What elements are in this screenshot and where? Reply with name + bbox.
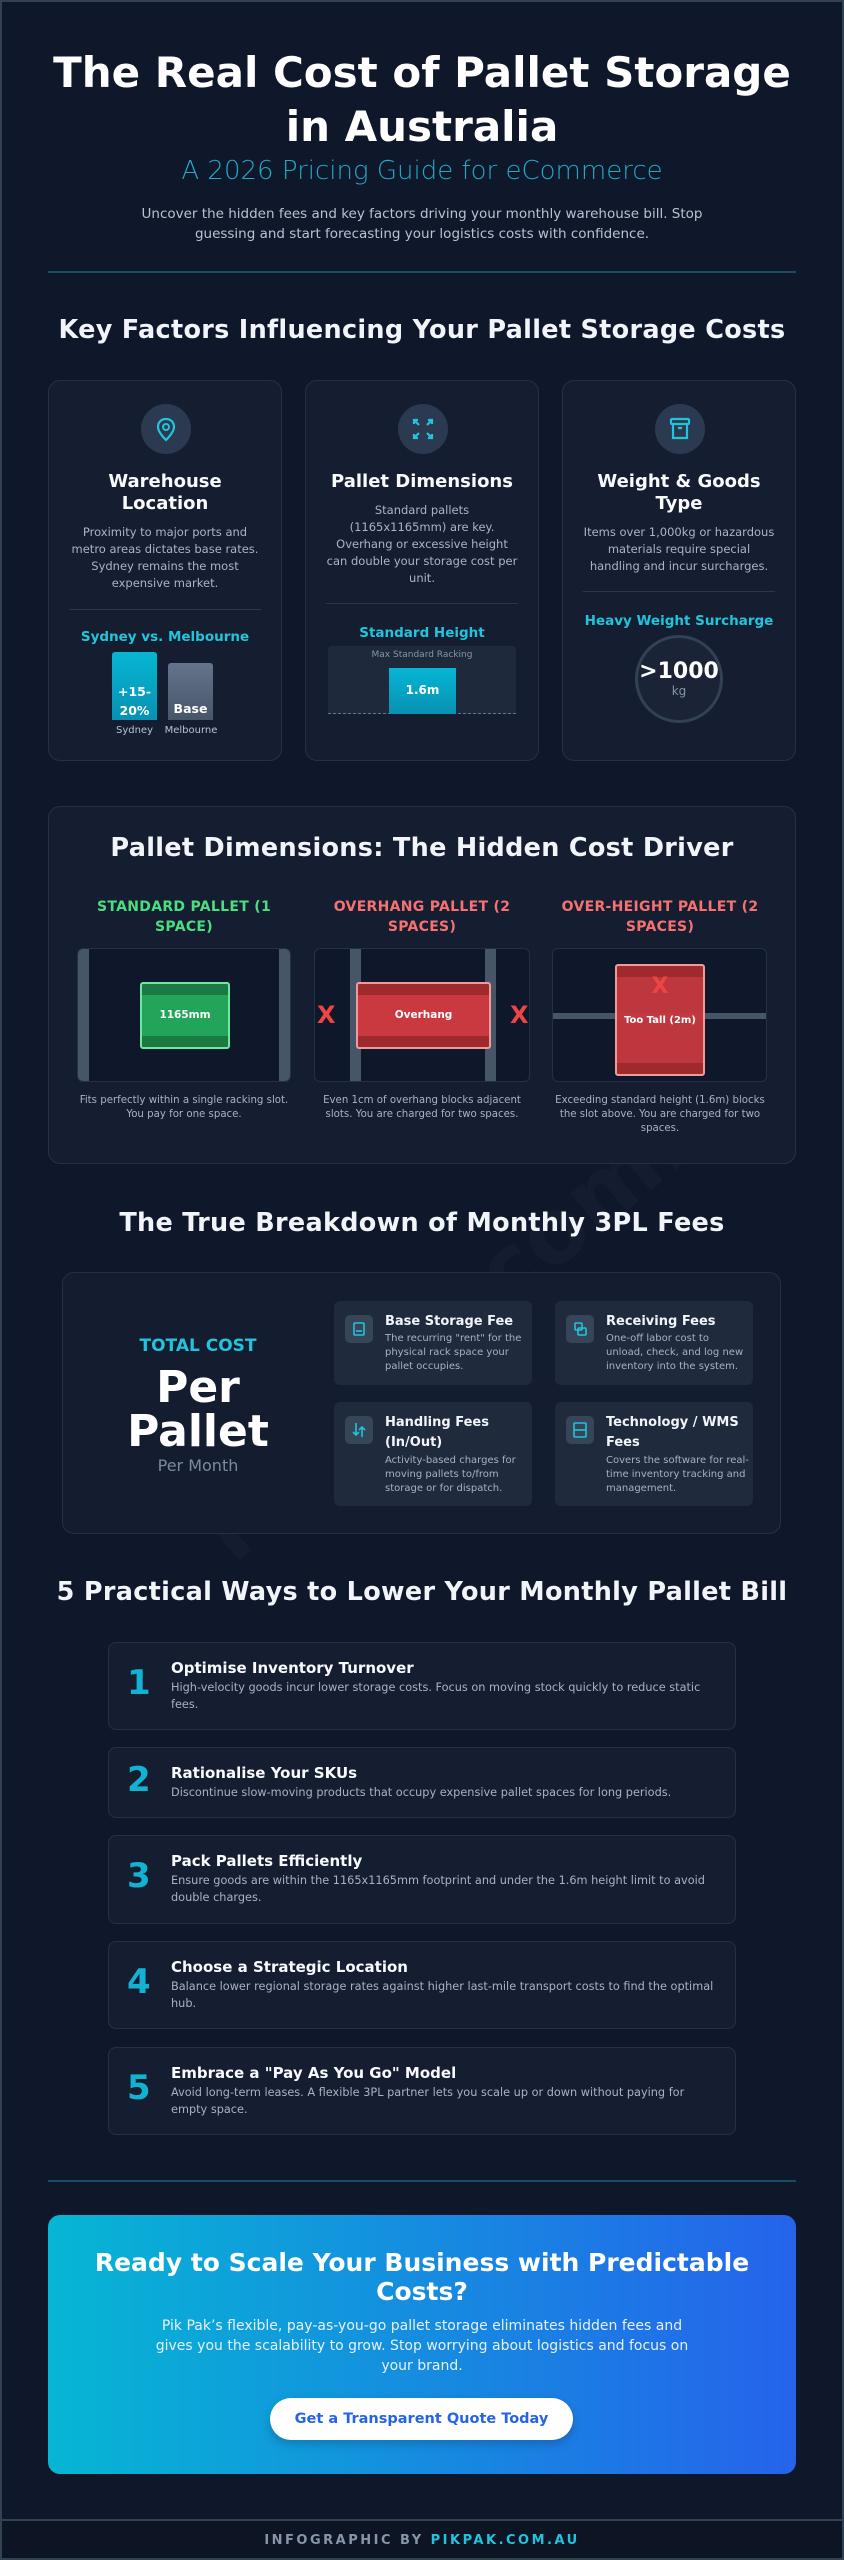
diagram: over-height pallet: [552, 948, 767, 1082]
footer: [0, 2519, 844, 2560]
card title: Type: [656, 493, 702, 514]
tip 4: Balance lower regional storage rates against higher last-mile transport costs to find the optimal hub.: [171, 1980, 713, 2010]
height chart: [328, 646, 516, 714]
tip 2: 2: [127, 1760, 151, 1800]
bar chart: sydney vs melbourne: 20%: [120, 703, 149, 718]
CTA button: [270, 2398, 573, 2440]
CTA heading: Ready to Scale Your Business with Predictable Costs?: [95, 2248, 749, 2306]
caption: overhang: Even 1cm of overhang blocks adjacent slots. You are charged for two spaces.: [323, 1095, 521, 1120]
chart heading: Sydney vs. Melbourne: [81, 629, 249, 645]
fee: handling: Handling Fees: [385, 1415, 489, 1430]
fee: base storage: [334, 1301, 532, 1385]
diagram: over-height pallet: X: [652, 974, 668, 999]
title: The Real Cost of Pallet Storage: [53, 48, 791, 97]
caption: standard: Fits perfectly within a single racking slot. You pay for one space.: [80, 1095, 288, 1120]
intro text: Uncover the hidden fees and key factors driving your monthly warehouse bill. Stop guessing and start forecasting your logistics costs with confidence.: [142, 206, 702, 242]
panel: pallet dimensions hidden cost: [48, 806, 796, 1164]
icon: storage: [345, 1315, 373, 1343]
total cost block: Per: [156, 1362, 240, 1413]
subtitle: A 2026 Pricing Guide for eCommerce: [181, 156, 663, 186]
fee: handling: [334, 1402, 532, 1506]
title: [53, 48, 791, 151]
tip 5: [108, 2047, 736, 2135]
fee: handling: (In/Out): [385, 1435, 442, 1450]
title: in Australia: [286, 102, 558, 151]
diagram: over-height pallet: Too Tall (2m): [624, 1015, 696, 1026]
tip 3: [108, 1835, 736, 1924]
label: standard pallet: SPACE): [155, 919, 213, 935]
panel: fee breakdown: [62, 1272, 781, 1534]
heading: 3PL fees: The True Breakdown of Monthly 3PL Fees: [119, 1208, 725, 1238]
footer: INFOGRAPHIC BY PIKPAK.COM.AU: [264, 2533, 580, 2548]
weight badge: [635, 635, 723, 723]
tip 4: Choose a Strategic Location: [171, 1958, 408, 1976]
bar chart: sydney vs melbourne: Sydney: [116, 725, 153, 736]
label: overhang pallet: SPACES): [388, 919, 456, 935]
heading: key factors: Key Factors Influencing Your Pallet Storage Costs: [58, 315, 785, 345]
tip 1: High-velocity goods incur lower storage costs. Focus on moving stock quickly to reduce static fees.: [171, 1681, 700, 1711]
icon: archive box: [655, 404, 705, 454]
panel: warehouse location: [48, 380, 282, 761]
diagram: standard pallet: 1165mm: [159, 1009, 211, 1021]
total cost block: TOTAL COST: [140, 1336, 256, 1356]
diagram: overhang pallet: X: [317, 1001, 336, 1029]
tip 4: 4: [127, 1962, 151, 2002]
caption: over-height: Exceeding standard height (1.6m) blocks the slot above. You are charged for two spaces.: [555, 1095, 765, 1134]
tip 5: Avoid long-term leases. A flexible 3PL partner lets you scale up or down without paying for empty space.: [171, 2086, 684, 2116]
card title: [597, 471, 761, 514]
height chart: Max Standard Racking: [372, 650, 472, 660]
tip 5: 5: [127, 2068, 151, 2108]
diagram: overhang pallet: Overhang: [395, 1009, 452, 1021]
icon: location pin: [141, 404, 191, 454]
tip 1: [108, 1642, 736, 1730]
icon: receiving: [566, 1315, 594, 1343]
CTA button: Get a Transparent Quote Today: [295, 2411, 548, 2427]
total cost block: [127, 1336, 269, 1475]
watermark: pikpak.com.au: [168, 1010, 804, 1568]
bar chart: sydney vs melbourne: Base: [174, 701, 207, 716]
fee: receiving: [555, 1301, 753, 1385]
fee: base storage: Base Storage Fee: [385, 1314, 513, 1329]
weight badge: kg: [672, 684, 686, 698]
label: standard pallet: STANDARD PALLET (1: [97, 899, 271, 915]
chart heading: Standard Height: [359, 625, 485, 641]
icon: wms: [566, 1416, 594, 1444]
card title: Pallet Dimensions: [331, 471, 513, 492]
icon: in/out arrows: [345, 1416, 373, 1444]
weight badge: >1000: [639, 659, 719, 684]
total cost block: Pallet: [127, 1406, 269, 1457]
label: over-height pallet: OVER-HEIGHT PALLET (2: [562, 899, 758, 915]
label: over-height pallet: SPACES): [626, 919, 694, 935]
label: overhang pallet: [334, 899, 510, 935]
icon: expand arrows: [398, 404, 448, 454]
panel: pallet dimensions: [305, 380, 539, 761]
label: standard pallet: [97, 899, 271, 935]
panel: weight & goods type: [562, 380, 796, 761]
tip 3: Ensure goods are within the 1165x1165mm footprint and under the 1.6m height limit to avoid double charges.: [171, 1874, 705, 1904]
card description: Standard pallets (1165x1165mm) are key. Overhang or excessive height can double your storage cost per unit.: [327, 503, 517, 585]
tip 1: Optimise Inventory Turnover: [171, 1659, 414, 1677]
CTA panel: [48, 2215, 796, 2474]
tip 2: Rationalise Your SKUs: [171, 1764, 357, 1782]
heading: 5 ways: 5 Practical Ways to Lower Your Monthly Pallet Bill: [57, 1577, 787, 1607]
card title: Warehouse: [108, 471, 222, 492]
tip 3: Pack Pallets Efficiently: [171, 1852, 362, 1870]
card title: Location: [122, 493, 208, 514]
tip 5: Embrace a "Pay As You Go" Model: [171, 2064, 456, 2082]
tip 4: [108, 1941, 736, 2029]
diagram: overhang pallet: [314, 948, 530, 1082]
height chart: 1.6m: [406, 683, 439, 697]
card title: Weight & Goods: [597, 471, 761, 492]
fee: receiving: One-off labor cost to unload, check, and log new inventory into the system.: [606, 1333, 743, 1372]
diagram: standard pallet: [77, 948, 291, 1082]
card title: [108, 471, 222, 514]
tip 1: 1: [127, 1663, 151, 1703]
total cost block: Per Month: [158, 1456, 238, 1475]
fee: receiving: Receiving Fees: [606, 1314, 716, 1329]
tip 3: 3: [127, 1856, 151, 1896]
fee: technology: Covers the software for real-time inventory tracking and management.: [606, 1455, 749, 1494]
fee: technology: Fees: [606, 1435, 640, 1450]
fee: base storage: The recurring "rent" for the physical rack space your pallet occupies.: [385, 1333, 521, 1372]
bar chart: sydney vs melbourne: Melbourne: [165, 725, 217, 736]
tip 2: Discontinue slow-moving products that occupy expensive pallet spaces for long periods.: [171, 1786, 671, 1799]
bar chart: sydney vs melbourne: +15-: [118, 684, 151, 699]
fee: handling: Activity-based charges for moving pallets to/from storage or for dispatch.: [385, 1455, 516, 1494]
label: overhang pallet: OVERHANG PALLET (2: [334, 899, 510, 915]
card description: Proximity to major ports and metro areas dictates base rates. Sydney remains the most expensive market.: [72, 525, 258, 590]
label: over-height pallet: [562, 899, 758, 935]
heading: hidden cost driver: Pallet Dimensions: The Hidden Cost Driver: [110, 833, 734, 863]
bar chart: sydney vs melbourne: [112, 652, 217, 736]
fee: technology: Technology / WMS: [606, 1415, 739, 1430]
card description: Items over 1,000kg or hazardous materials require special handling and incur surcharges.: [584, 525, 774, 573]
diagram: overhang pallet: X: [510, 1001, 529, 1029]
CTA text: Pik Pak’s flexible, pay-as-you-go pallet storage eliminates hidden fees and gives you the scalability to grow. Stop worrying about logistics and focus on your brand.: [156, 2318, 688, 2374]
chart heading: Heavy Weight Surcharge: [585, 613, 773, 629]
fee: technology: [555, 1402, 753, 1506]
tip 2: [108, 1747, 736, 1818]
